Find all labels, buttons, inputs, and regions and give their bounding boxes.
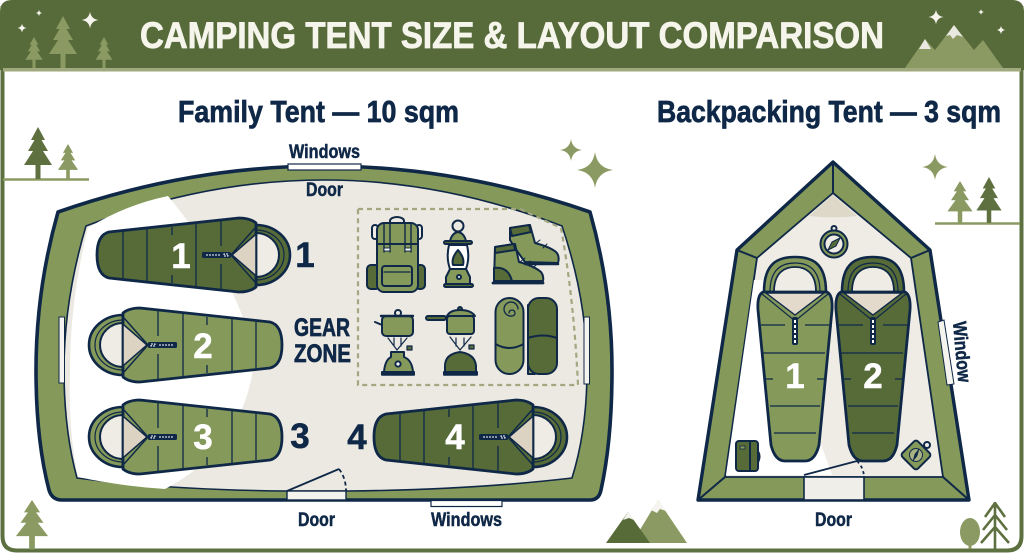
label: gear zone: ZONE xyxy=(294,340,351,368)
window right xyxy=(584,317,590,384)
icon: backpack xyxy=(367,217,425,292)
floor highlight xyxy=(70,196,253,489)
icon: folded mat xyxy=(528,298,557,374)
icon: gas stove with saucepan xyxy=(426,307,477,375)
compass case xyxy=(900,439,932,471)
sleeping bag 1 xyxy=(758,257,832,461)
label: gear zone xyxy=(294,314,351,368)
header banner xyxy=(0,0,1024,72)
gear zone dashed area xyxy=(358,209,578,385)
icon: rolled sleeping mat xyxy=(496,298,524,374)
decoration: mountains bottom xyxy=(606,500,687,543)
door xyxy=(804,461,864,500)
floor highlight xyxy=(726,280,832,475)
label: window backpacking: Window xyxy=(948,321,974,383)
icon: header stars right xyxy=(928,9,1005,34)
icon: header stars left xyxy=(18,10,98,33)
label: door bottom family: Door xyxy=(298,510,336,531)
window xyxy=(938,320,954,385)
title: CAMPING TENT SIZE & LAYOUT COMPARISON xyxy=(140,15,884,56)
icon: header trees xyxy=(25,16,112,68)
icon: lantern xyxy=(444,220,473,287)
decoration: sparkle and trees right xyxy=(922,154,1020,224)
sleeping bag 2: 2 xyxy=(863,357,883,396)
sleeping bag 3 xyxy=(89,400,282,474)
door top label: Door xyxy=(306,180,344,201)
icon: header mountains xyxy=(905,25,1003,68)
sleeping bag 4 xyxy=(374,400,567,474)
label: gear zone: GEAR xyxy=(294,314,350,342)
heading: family tent: Family Tent — 10 sqm xyxy=(178,94,459,129)
label: bag number 1: 1 xyxy=(295,236,315,275)
panel: family tent floor plan xyxy=(36,164,612,506)
window left xyxy=(59,317,64,383)
tent wall xyxy=(36,166,612,500)
sleeping bag 1: 1 xyxy=(171,237,191,276)
tent wall xyxy=(698,162,969,500)
sleeping bag 3: 3 xyxy=(193,418,213,457)
decoration: trees bottom right xyxy=(960,502,1009,549)
decoration: sparkles centre xyxy=(560,139,613,188)
sleeping bag 1 xyxy=(97,218,290,292)
decoration: tree bottom left xyxy=(16,500,48,549)
icon: camping stove with pot xyxy=(375,310,414,375)
compass xyxy=(820,226,848,258)
label: bag number 4: 4 xyxy=(347,418,367,457)
tent seams xyxy=(698,162,969,500)
floor shading at apex xyxy=(809,195,857,218)
tent floor xyxy=(64,180,587,491)
door bottom xyxy=(287,469,346,500)
label: windows bottom: Windows xyxy=(431,510,502,531)
sleeping bag 1: 1 xyxy=(785,357,805,396)
sleeping bag 4: 4 xyxy=(445,418,465,457)
sleeping bag 2 xyxy=(89,308,282,382)
sleeping bag 2: 2 xyxy=(193,327,213,366)
panel: backpacking tent floor plan xyxy=(698,162,969,500)
window bottom xyxy=(431,500,502,506)
window top xyxy=(288,164,361,170)
tent floor xyxy=(725,193,943,477)
icon: boots xyxy=(493,225,559,283)
label: windows top: Windows xyxy=(289,142,360,163)
label: bag number 3: 3 xyxy=(290,417,310,456)
label: door backpacking: Door xyxy=(815,510,853,531)
small bag xyxy=(736,441,760,471)
sleeping bag 2 xyxy=(836,257,910,461)
decoration: trees on ground left xyxy=(3,127,89,180)
